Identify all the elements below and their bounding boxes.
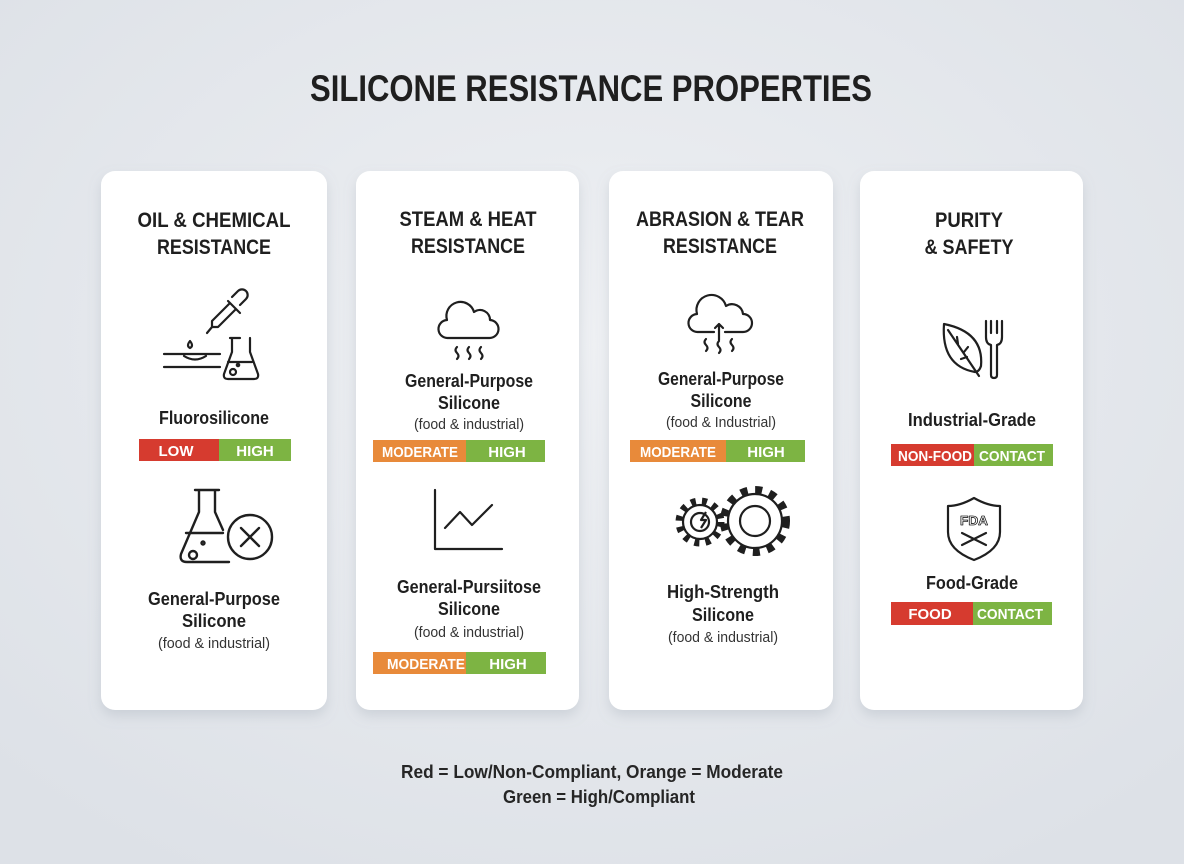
label: general-purpose silicone: General-Purpose bbox=[405, 371, 533, 391]
heading: purity & safety: & SAFETY bbox=[924, 236, 1014, 259]
icon: FDA shield bbox=[948, 498, 1000, 560]
rating bar: non-food contact: NON-FOOD bbox=[898, 448, 972, 465]
heading: abrasion & tear: ABRASION & TEAR bbox=[636, 208, 804, 231]
panel: purity & safety bbox=[860, 171, 1083, 710]
heading: oil & chemical: OIL & CHEMICAL bbox=[138, 209, 291, 232]
legend bbox=[401, 762, 783, 807]
heading: oil & chemical: RESISTANCE bbox=[157, 236, 271, 259]
rating bar: moderate/high: HIGH bbox=[747, 444, 785, 461]
icon: steam cloud bbox=[438, 302, 499, 359]
label: general-purpose silicone bbox=[658, 369, 784, 431]
label: general-purpose silicone bbox=[405, 371, 533, 433]
rating bar: food contact: FOOD bbox=[908, 606, 952, 623]
rating bar: moderate/high: MODERATE bbox=[382, 444, 458, 461]
rating bar: moderate/high: MODERATE bbox=[640, 444, 716, 461]
label: high-strength silicone: Silicone bbox=[692, 605, 754, 625]
heading: steam & heat: STEAM & HEAT bbox=[400, 208, 537, 231]
icon: cloud with arrow bbox=[688, 295, 752, 353]
icon: line chart bbox=[435, 490, 502, 549]
rating bar: low/high: LOW bbox=[158, 443, 194, 460]
rating bar: moderate/high bbox=[630, 440, 805, 462]
label: general-pursiitose silicone: (food & industrial) bbox=[414, 624, 524, 641]
panel: abrasion & tear resistance bbox=[609, 171, 833, 710]
label: high-strength silicone bbox=[667, 582, 779, 646]
label: general-purpose silicone: (food & industrial) bbox=[414, 416, 524, 433]
heading: purity & safety bbox=[924, 209, 1014, 259]
legend: Green = High/Compliant bbox=[503, 787, 695, 807]
rating bar: moderate/high bbox=[373, 652, 546, 674]
icon: FDA shield: FDA bbox=[960, 513, 989, 528]
rating bar: moderate/high: HIGH bbox=[489, 656, 527, 673]
rating bar: moderate/high bbox=[373, 440, 545, 462]
heading: steam & heat bbox=[400, 208, 537, 258]
panel: steam & heat resistance bbox=[356, 171, 579, 710]
heading: abrasion & tear: RESISTANCE bbox=[663, 235, 777, 258]
label: food-grade: Food-Grade bbox=[926, 573, 1018, 593]
rating bar: moderate/high: HIGH bbox=[488, 444, 526, 461]
label: general-purpose silicone: General-Purpose bbox=[148, 589, 280, 609]
icon: dropper and flask bbox=[164, 289, 258, 379]
heading: steam & heat: RESISTANCE bbox=[411, 235, 525, 258]
rating bar: non-food contact bbox=[891, 444, 1053, 466]
heading: oil & chemical bbox=[138, 209, 291, 259]
label: general-pursiitose silicone: General-Pursiitose bbox=[397, 577, 541, 597]
icon: leaf and fork bbox=[944, 321, 1002, 378]
icon: flask with x bbox=[181, 490, 272, 562]
label: general-purpose silicone: (food & industrial) bbox=[158, 635, 270, 652]
heading: purity & safety: PURITY bbox=[935, 209, 1003, 232]
rating bar: low/high bbox=[139, 439, 291, 461]
heading: abrasion & tear bbox=[636, 208, 804, 258]
panel: oil & chemical resistance bbox=[101, 171, 327, 710]
label: industrial-grade: Industrial-Grade bbox=[908, 410, 1036, 430]
label: general-purpose silicone: Silicone bbox=[182, 611, 246, 631]
label: general-purpose silicone: General-Purpose bbox=[658, 369, 784, 389]
title: SILICONE RESISTANCE PROPERTIES bbox=[310, 68, 872, 109]
rating bar: low/high: HIGH bbox=[236, 443, 274, 460]
label: fluorosilicone: Fluorosilicone bbox=[159, 408, 269, 428]
label: general-pursiitose silicone bbox=[397, 577, 541, 641]
label: general-purpose silicone: (food & Industrial) bbox=[666, 414, 776, 431]
rating bar: non-food contact: CONTACT bbox=[979, 448, 1045, 465]
label: general-pursiitose silicone: Silicone bbox=[438, 599, 500, 619]
label: high-strength silicone: (food & industrial) bbox=[668, 629, 778, 646]
label: general-purpose silicone: Silicone bbox=[438, 393, 500, 413]
legend: Red = Low/Non-Compliant, Orange = Moderate bbox=[401, 762, 783, 782]
label: general-purpose silicone bbox=[148, 589, 280, 652]
rating bar: food contact bbox=[891, 602, 1052, 625]
label: general-purpose silicone: Silicone bbox=[690, 391, 752, 411]
rating bar: food contact: CONTACT bbox=[977, 606, 1043, 623]
label: high-strength silicone: High-Strength bbox=[667, 582, 779, 602]
rating bar: moderate/high: MODERATE bbox=[387, 656, 465, 673]
icon: gears bbox=[679, 490, 786, 552]
